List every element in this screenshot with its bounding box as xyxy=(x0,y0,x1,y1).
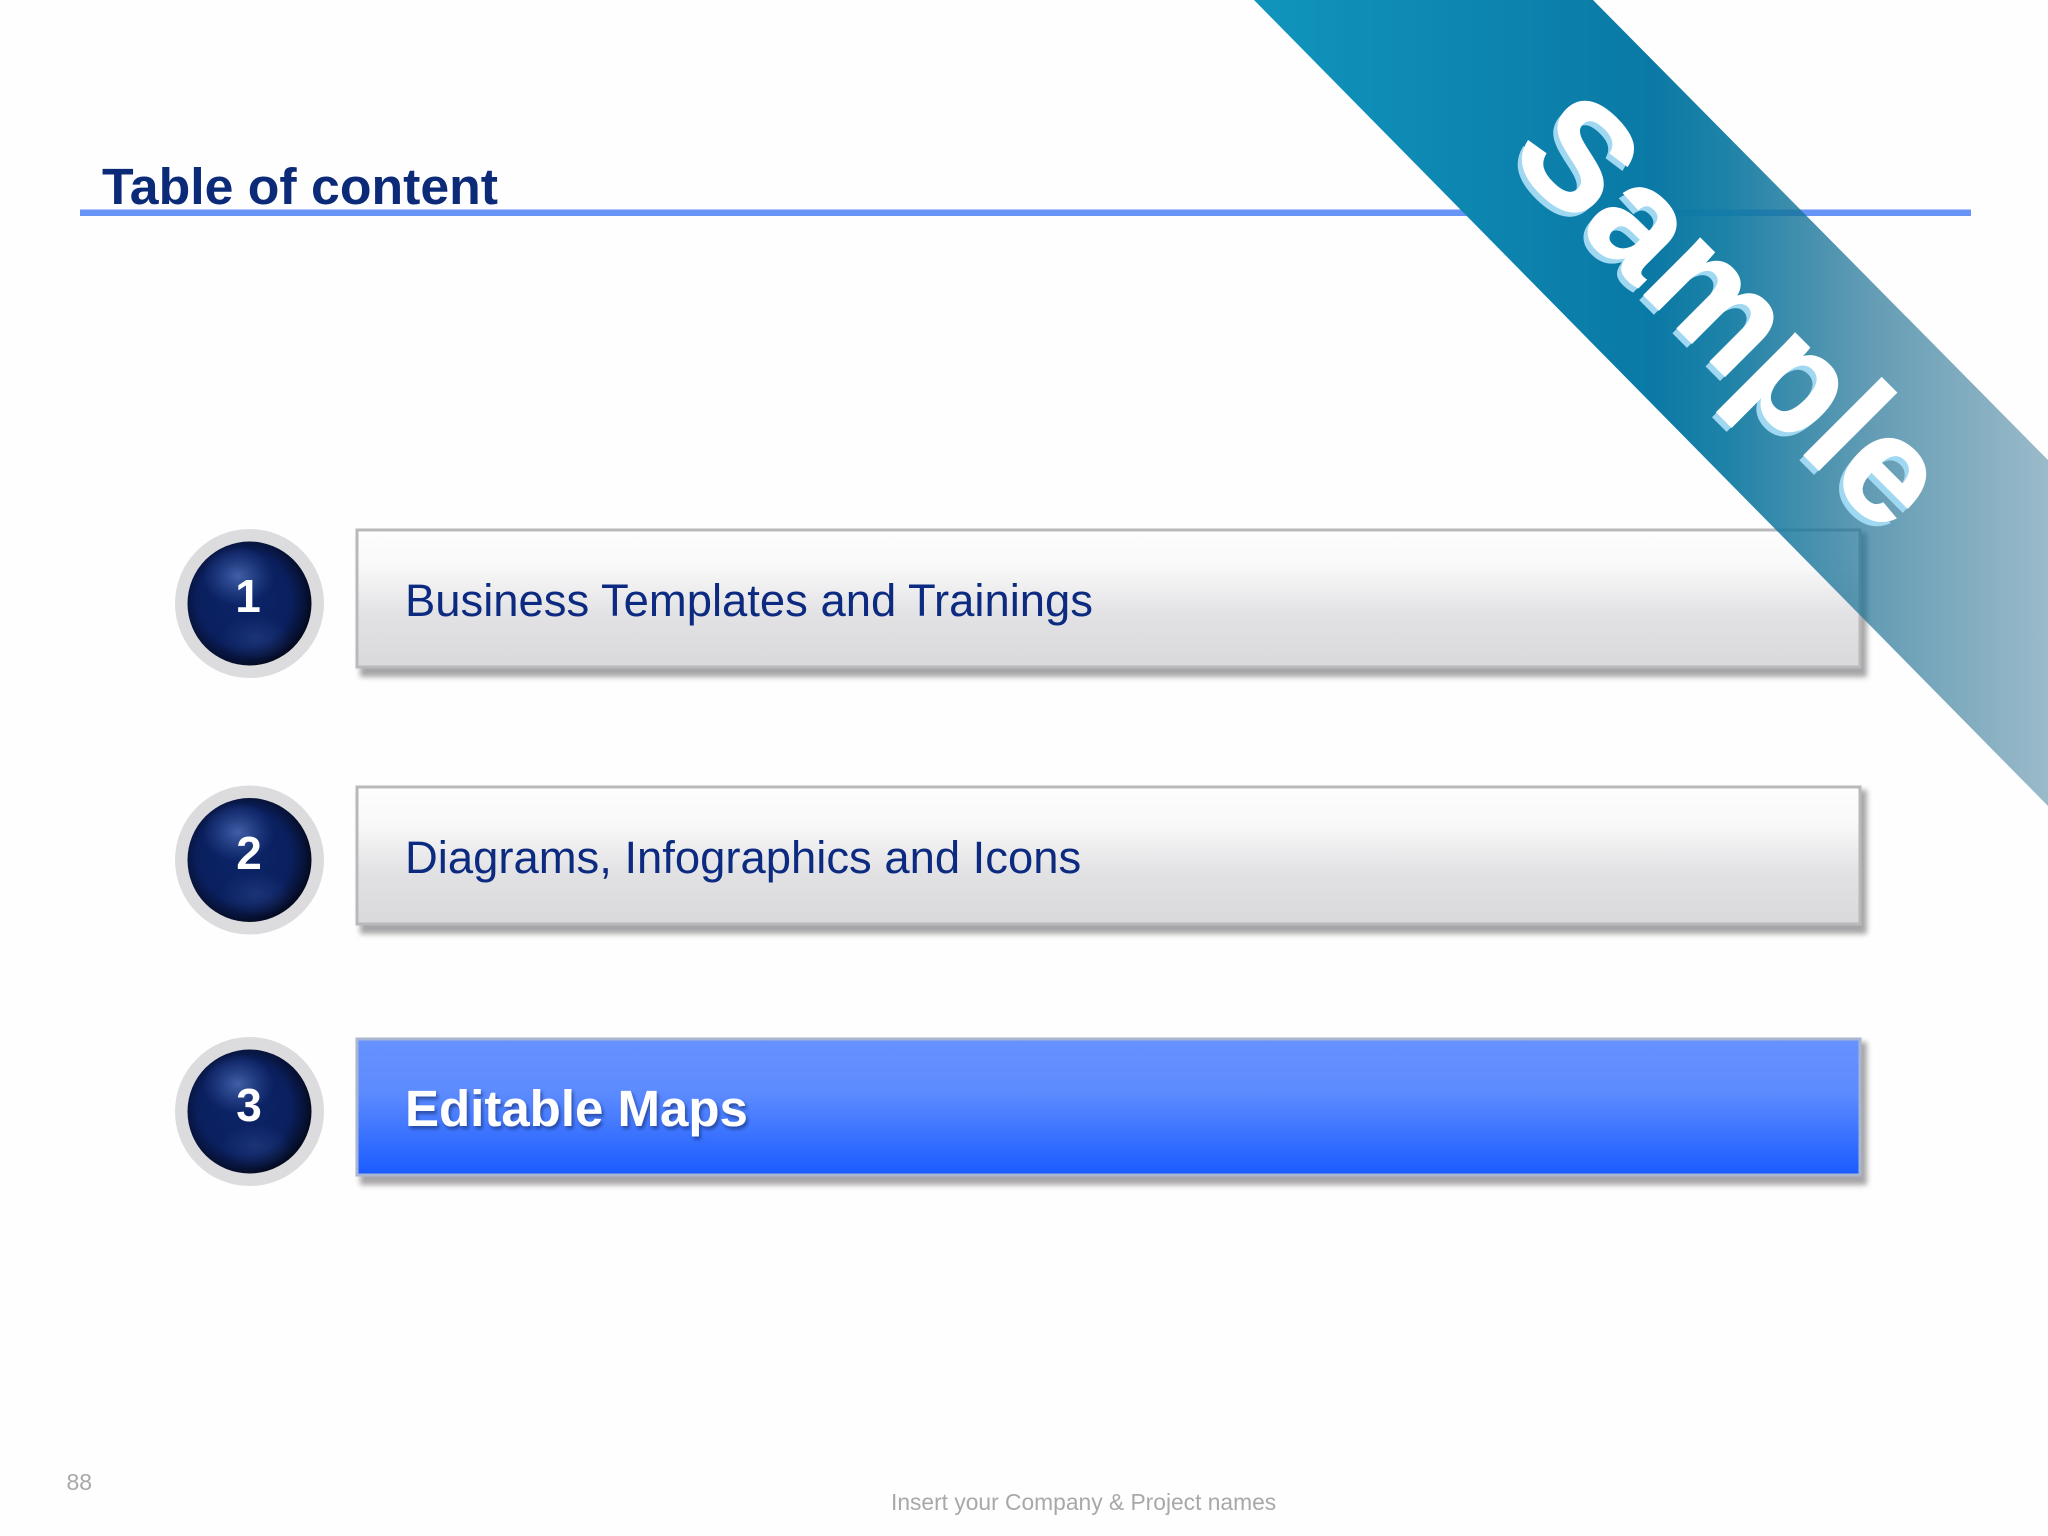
title: Table of content xyxy=(102,158,498,215)
sample ribbon xyxy=(1254,0,2048,806)
number badge 3 xyxy=(175,1037,324,1186)
number badge 2: 2 xyxy=(236,827,262,879)
number badge 3: 3 xyxy=(236,1079,262,1131)
number badge 1: 1 xyxy=(235,570,261,622)
menu bar 3 highlighted: Editable Maps xyxy=(405,1080,748,1137)
menu bar 1 xyxy=(357,530,1867,677)
menu bar 2 xyxy=(357,787,1867,934)
ribbon label: Sample xyxy=(1483,60,1983,560)
menu bar 2: Diagrams, Infographics and Icons xyxy=(405,832,1081,883)
menu bar 1: Business Templates and Trainings xyxy=(405,575,1093,626)
number badge 1 xyxy=(175,529,324,678)
page number: 88 xyxy=(66,1469,92,1495)
menu bar 3 highlighted xyxy=(357,1039,1867,1185)
number badge 2 xyxy=(175,786,324,934)
footer text: Insert your Company & Project names xyxy=(891,1489,1276,1515)
title underline xyxy=(80,210,1971,216)
ribbon label: Sample xyxy=(1479,65,1978,564)
